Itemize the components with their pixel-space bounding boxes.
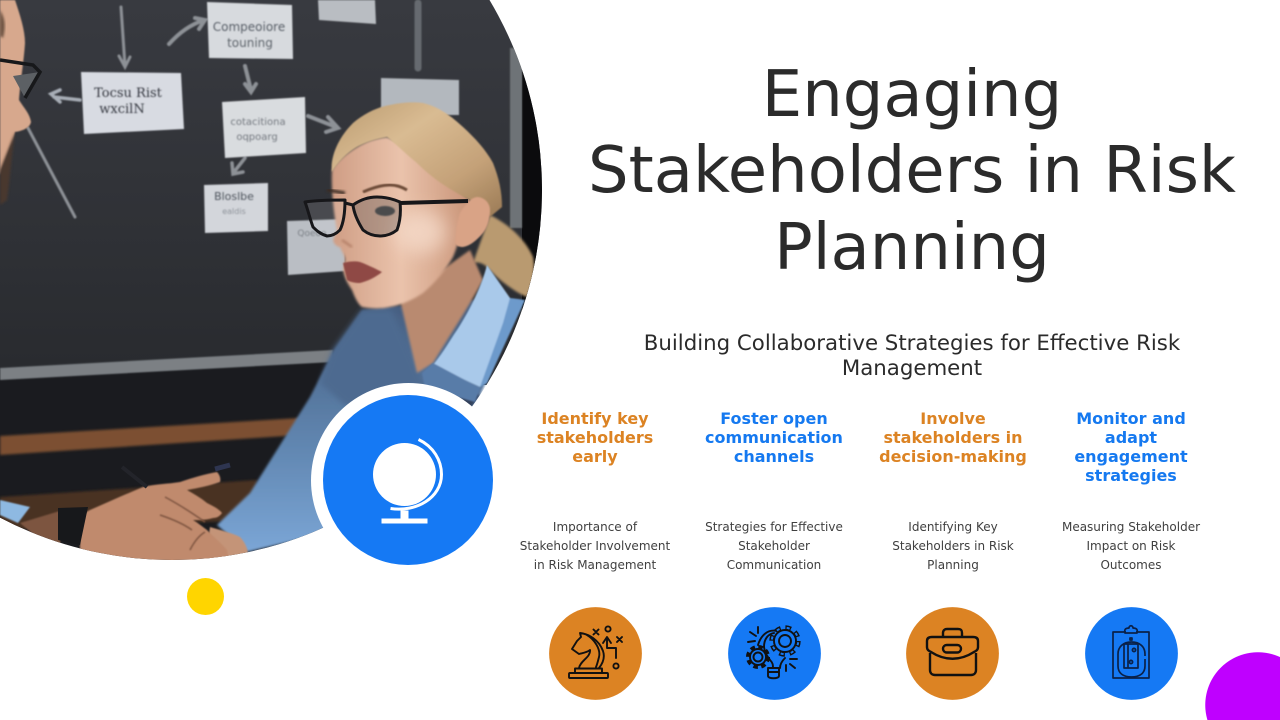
column 4 heading: engagement [1074, 447, 1188, 466]
column 4 description: Outcomes [1100, 558, 1162, 572]
column 3 heading: Involve [920, 409, 986, 428]
woman's face [327, 137, 470, 308]
woman's shirt [217, 300, 520, 552]
column 2 description: Strategies for Effective [705, 520, 843, 534]
title: Engaging [762, 58, 1062, 132]
woman's collar [422, 265, 525, 402]
note labels: Compeoiore [213, 20, 285, 34]
icon: lightbulb with gears [728, 607, 821, 700]
icon: chess knight strategy [549, 607, 642, 700]
photo: stakeholders at a risk planning board [0, 0, 542, 560]
column 4 heading: adapt [1105, 428, 1157, 447]
woman's ear [455, 197, 490, 247]
column 1 description: Stakeholder Involvement [520, 539, 670, 553]
purple corner circle [1205, 652, 1280, 720]
note labels: cotacitiona [230, 117, 286, 128]
subtitle [644, 331, 1180, 381]
title [588, 58, 1236, 284]
column 1 description [520, 520, 670, 572]
woman's hair [332, 102, 502, 217]
column 3 heading: stakeholders in [883, 428, 1023, 447]
note labels: Qoeoo [297, 229, 327, 239]
woman's ponytail [473, 215, 534, 297]
man at left [0, 0, 40, 205]
woman's neck [400, 250, 483, 373]
note labels [94, 20, 327, 239]
note labels: ealdis [222, 207, 246, 216]
column 3 description: Identifying Key [908, 520, 998, 534]
column 3 heading [879, 409, 1027, 466]
sticky notes on the board [81, 0, 459, 275]
note labels: Bloslbe [214, 190, 254, 203]
column 4 heading: Monitor and [1076, 409, 1186, 428]
man's hands and pens [0, 465, 248, 565]
column 2 heading: channels [734, 447, 814, 466]
column 4 description: Measuring Stakeholder [1062, 520, 1200, 534]
lower wall and wooden rails [0, 350, 360, 560]
column 1 heading: Identify key [541, 409, 649, 428]
column 3 description: Planning [927, 558, 979, 572]
icon: globe [373, 438, 443, 524]
note labels: Tocsu Rist [94, 86, 163, 101]
column 3 description [892, 520, 1014, 572]
column 2 description [705, 520, 843, 572]
column 2 heading: Foster open [720, 409, 828, 428]
note labels: oqpoarg [236, 132, 278, 143]
subtitle: Management [842, 356, 982, 381]
globe badge [310, 382, 506, 578]
column 1 description: in Risk Management [534, 558, 656, 572]
blackboard [0, 0, 560, 385]
column 2 description: Communication [727, 558, 821, 572]
column 3 heading: decision-making [879, 447, 1027, 466]
subtitle: Building Collaborative Strategies for Effective Risk [644, 331, 1180, 356]
note labels: wxcilN [99, 102, 145, 117]
icon: briefcase [906, 607, 999, 700]
chalk arrows on the board [28, 3, 418, 217]
note labels: touning [227, 36, 273, 50]
column 2 heading: communication [705, 428, 843, 447]
column 1 heading [537, 409, 653, 466]
column 1 heading: stakeholders [537, 428, 653, 447]
woman's glasses [305, 197, 468, 236]
column 4 heading: strategies [1085, 466, 1177, 485]
column 2 description: Stakeholder [738, 539, 810, 553]
title: Planning [774, 210, 1050, 284]
column 2 heading [705, 409, 843, 466]
title: Stakeholders in Risk [588, 134, 1236, 208]
column 3 description: Stakeholders in Risk [892, 539, 1014, 553]
yellow dot [187, 578, 224, 615]
column 1 heading: early [572, 447, 618, 466]
icon: clipboard with sharpener [1085, 607, 1178, 700]
column 4 description: Impact on Risk [1087, 539, 1175, 553]
column 1 description: Importance of [553, 520, 637, 534]
column 4 heading [1074, 409, 1188, 485]
column 4 description [1062, 520, 1200, 572]
